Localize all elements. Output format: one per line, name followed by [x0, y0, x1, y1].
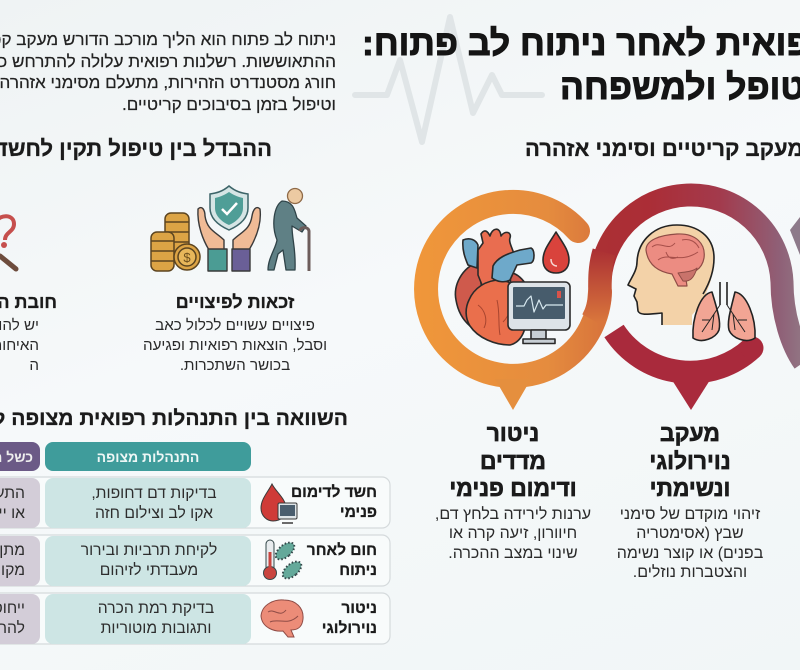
vitals heading: ניטור	[487, 420, 539, 446]
icon: shield with check	[210, 186, 248, 230]
row 2 title: ניתוח	[339, 562, 377, 578]
compensation body: פיצויים עשויים לכלול כאב	[155, 317, 315, 334]
burden body	[0, 317, 39, 374]
icon: coins	[151, 213, 200, 271]
panel: vitals and internal bleeding	[435, 420, 591, 562]
neurological body	[617, 506, 763, 581]
compensation heading: זכאות לפיצויים	[176, 292, 294, 312]
row 3 expected	[98, 600, 214, 636]
row 1 expected: בדיקות דם דחופות,	[91, 485, 217, 502]
row 2 title: חום לאחר	[307, 542, 377, 559]
row 1 expected	[91, 485, 217, 522]
row 2 failure	[0, 542, 25, 578]
neurological heading: ונשימתי	[650, 475, 730, 501]
neurological heading	[649, 420, 731, 501]
row 3 expected: בדיקת רמת הכרה	[98, 600, 214, 617]
icon: elderly person with cane	[268, 188, 309, 271]
row 3 expected: ותגובות מוטוריות	[101, 620, 211, 636]
row 2 card	[0, 535, 390, 586]
row 3 card	[0, 593, 390, 644]
burden body: ה	[29, 357, 39, 374]
orange ring with pointer	[426, 202, 600, 410]
row 2 expected: מעבדתי לזיהום	[100, 562, 198, 578]
panel: burden of proof	[0, 292, 57, 374]
vitals body: שינוי במצב ההכרה.	[448, 544, 578, 562]
icon: small brain	[261, 600, 303, 637]
neurological heading: נוירולוגי	[649, 448, 731, 474]
icon: magnifier with question mark	[0, 216, 16, 269]
vitals body: ערנות לירידה בלחץ דם,	[435, 506, 591, 522]
row 3 title: ניטור	[341, 600, 377, 617]
compensation body	[143, 317, 327, 374]
icon: coins: $	[183, 250, 191, 265]
vitals heading	[449, 420, 577, 501]
row 1 expected: אקו לב וצילום חזה	[95, 504, 213, 522]
icon: thermometer and bacteria	[264, 539, 304, 582]
row 3 title: נוירולוגי	[322, 620, 377, 636]
row 3 title	[322, 600, 377, 636]
neurological body: שבץ (אסימטריה	[636, 525, 744, 542]
row 2 expected: לקיחת תרביות ובירור	[81, 542, 217, 559]
neurological body: זיהוי מוקדם של סימני	[620, 506, 760, 522]
row 1 title	[291, 484, 377, 520]
expected cells	[45, 478, 251, 644]
intro paragraph: וטיפול בזמן בסיבוכים קריטיים.	[122, 94, 336, 114]
intro paragraph	[0, 30, 336, 114]
row 1 title: חשד לדימום	[291, 484, 377, 501]
vitals body	[435, 506, 591, 562]
row 1 card	[0, 477, 390, 528]
row 2 title	[306, 542, 377, 578]
vitals heading: מדדים	[480, 448, 546, 474]
icon: small drop with monitor	[261, 484, 297, 523]
header label: expected conduct: התנהלות מצופה	[97, 449, 199, 465]
failure cells	[0, 478, 40, 644]
header: medical failure	[0, 442, 40, 471]
compensation body: בכושר השתכרות.	[180, 357, 290, 374]
compensation body: וסבל, הוצאות רפואיות ופגיעה	[143, 337, 327, 354]
vitals heading: ודימום פנימי	[449, 475, 577, 501]
panel: neurological monitoring	[617, 420, 763, 581]
row 1 title: פנימי	[340, 504, 377, 520]
panel: right to compensation	[143, 292, 327, 374]
intro paragraph: חורג מסטנדרט הזהירות, מתעלם מסימני אזהרה	[0, 73, 336, 92]
crimson ring with pointer	[593, 195, 800, 410]
row 3 failure	[0, 600, 25, 636]
row 1 failure	[0, 485, 25, 522]
icon: head with brain and lungs	[628, 225, 755, 340]
neurological body: בפנים) או קוצר נשימה	[617, 544, 763, 562]
background ECG watermark	[355, 17, 542, 142]
header: expected conduct	[45, 442, 251, 471]
neurological heading: מעקב	[660, 420, 720, 446]
icon: protecting hands	[198, 208, 260, 271]
comparison table	[0, 442, 390, 644]
icon: heart, blood drop and monitor	[455, 229, 570, 345]
vitals body: חיוורון, זיעה קרה או	[449, 525, 577, 542]
row 2 expected	[81, 542, 217, 578]
neurological body: והצטברות נוזלים.	[633, 564, 747, 581]
